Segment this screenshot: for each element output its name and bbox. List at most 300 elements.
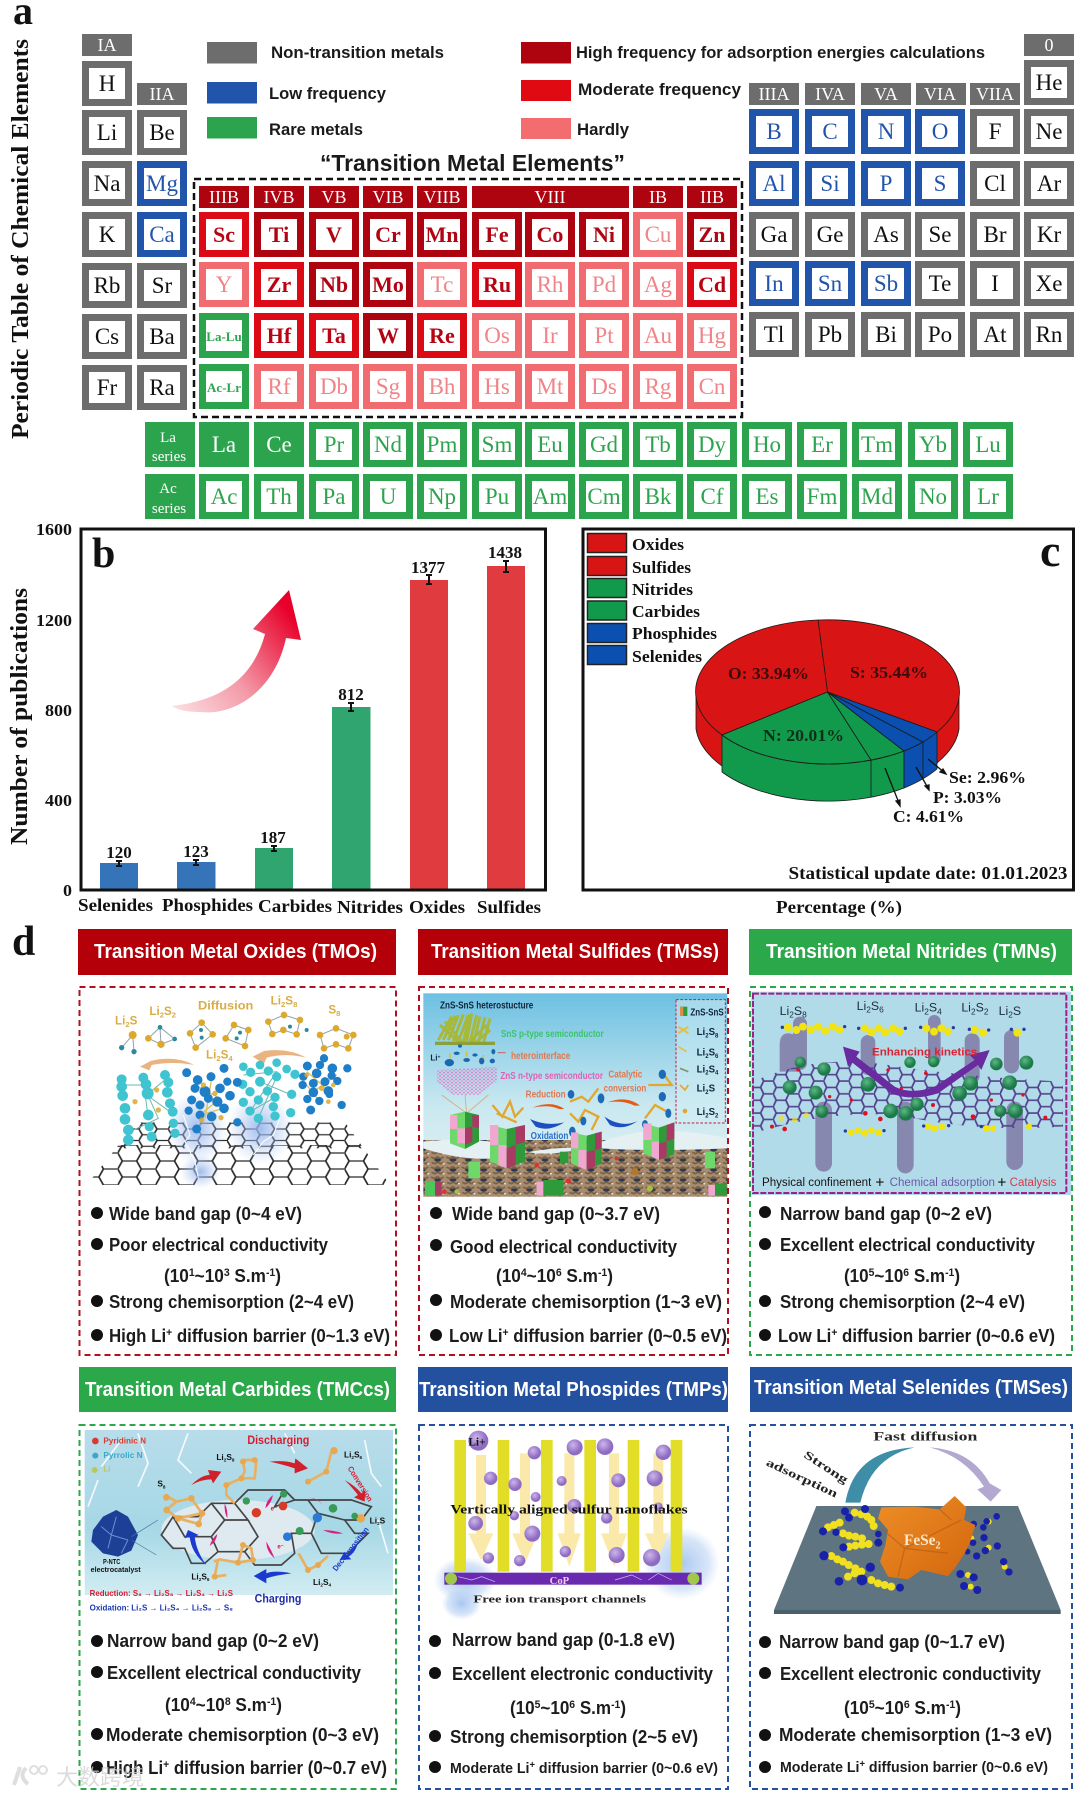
property list: TMSs: ~10 (527, 1266, 556, 1286)
y axis tick labels: 0 (63, 881, 72, 900)
transition-metal element cells: Tc (431, 272, 453, 297)
transition-metal element cells: Rg (645, 374, 672, 399)
y axis tick labels: 400 (45, 791, 72, 810)
chart frame (583, 529, 1074, 890)
watermark logo and text: 大数跨境 (56, 1765, 144, 1790)
transition-metal element cells: Rf (268, 374, 291, 399)
property list: TMNs: diffusion barrier (0~0.6 eV) (837, 1326, 1055, 1346)
illustration: charge and discharge cycle: P-NTC (103, 1557, 121, 1566)
transition-metal element cells: Ac-Lr (207, 380, 241, 395)
lanthanide series row: Eu (537, 432, 563, 457)
property list: TMOs: 1 (189, 1267, 195, 1279)
illustration: ZnS-SnS heterostructure: heterointerface (511, 1051, 571, 1062)
left main-group elements (86, 64, 184, 406)
transition-metal group labels: IB (649, 187, 667, 207)
illustration: charge and discharge cycle: S (323, 1577, 329, 1587)
transition-metal element cells: Ni (593, 222, 615, 247)
pie legend: Nitrides (632, 580, 693, 599)
property list: TMPs: Narrow band gap (0-1.8 eV) (452, 1630, 675, 1650)
legend box: ZnS-SnS species: Li (697, 1048, 705, 1059)
illustration: charge and discharge cycle: 2 (224, 1458, 227, 1463)
property list: TMOs: ~10 (195, 1266, 224, 1286)
illustration: lithium polysulfide diffusion on graphene: 4 (228, 1054, 233, 1063)
bar value labels: 187 (260, 828, 286, 847)
transition-metal element cells: Pd (592, 272, 617, 297)
bar value labels (106, 543, 522, 862)
right main-group elements: I (991, 271, 999, 296)
main-group group labels: 0 (1044, 35, 1054, 55)
legend box: ZnS-SnS species: 2 (705, 1033, 709, 1039)
illustration: confinement, adsorption and catalysis: Enhancing kinetics (872, 1047, 977, 1059)
left main-group elements: K (99, 222, 116, 247)
illustration: charge and discharge cycle: S (354, 1449, 360, 1459)
illustration: charge and discharge cycle: electrocatalyst (91, 1565, 141, 1574)
transition-metal element cells: Sg (376, 374, 401, 399)
illustration: confinement, adsorption and catalysis: Chemical adsorption (890, 1175, 995, 1189)
illustration: lithium polysulfide diffusion on graphene: Li (206, 1048, 216, 1061)
transition-metal element cells: Re (429, 323, 455, 348)
actinide series row: U (380, 484, 397, 509)
illustration: confinement, adsorption and catalysis: 2 (984, 1006, 989, 1016)
pie labels: S: 35.44% (850, 663, 928, 682)
property list: TMNs: + (831, 1327, 837, 1339)
property list: TMNs: Excellent electrical conductivity (780, 1235, 1035, 1255)
dashed card border (80, 1425, 396, 1789)
right main-group elements: Ne (1036, 119, 1062, 144)
property list: TMPs: (10 (510, 1698, 536, 1718)
category labels: Sulfides (477, 897, 541, 917)
right main-group elements: Ga (761, 222, 787, 247)
y axis tick labels: 1200 (36, 611, 72, 630)
property list: TMPs: Strong chemisorption (2~5 eV) (450, 1727, 698, 1747)
growth arrow (172, 590, 301, 712)
property list: TMSes: 6 (904, 1699, 910, 1711)
illustration: ZnS-SnS heterostructure: + (437, 1054, 440, 1060)
illustration: lithium polysulfide diffusion on graphene: S (328, 1003, 336, 1016)
illustration: confinement, adsorption and catalysis: 6 (879, 1005, 884, 1015)
property list: TMSs: Low Li (449, 1326, 506, 1346)
property list: TMSes: (10 (844, 1698, 870, 1718)
illustration: ZnS-SnS heterostructure: Li (430, 1053, 437, 1062)
pie labels: C: 4.61% (893, 807, 964, 826)
property list: TMOs: diffusion barrier (0~1.3 eV) (172, 1326, 390, 1346)
property list: TMOs: + (166, 1327, 172, 1339)
property list: TMSes: + (859, 1759, 865, 1770)
illustration: lithium polysulfide diffusion on graphene: Li (149, 1005, 160, 1018)
legend box: ZnS-SnS species: S (709, 1048, 716, 1059)
legend box: ZnS-SnS species: Li (697, 1107, 705, 1118)
illustration: vertically aligned sulfur nanoflakes: Li+ (468, 1436, 486, 1448)
illustration: charge and discharge cycle: S (201, 1571, 207, 1581)
transition-metal group labels: IVB (264, 187, 294, 207)
actinide series row: Np (428, 484, 456, 509)
pie leader arrows (885, 759, 946, 806)
property list: TMSs: S.m (562, 1266, 598, 1286)
illustration: charge and discharge cycle: Charging (255, 1592, 301, 1606)
actinide series row: Md (861, 484, 893, 509)
illustration: ZnS-SnS heterostructure: SnS p-type semiconductor (501, 1029, 604, 1040)
chart frame (81, 529, 546, 890)
illustration: lithium polysulfide diffusion on graphene: S (221, 1048, 229, 1061)
property list: TMSes: S.m (910, 1698, 946, 1718)
property list: TMSs: 6 (556, 1267, 562, 1279)
main-group group labels: IIA (150, 84, 174, 104)
property list: TMOs: Wide band gap (0~4 eV) (109, 1204, 302, 1224)
legend box: ZnS-SnS species: 2 (715, 1113, 719, 1119)
property list: TMNs: Strong chemisorption (2~4 eV) (780, 1292, 1025, 1312)
lanthanide series row: La (160, 430, 176, 446)
transition-metal element cells: Rh (537, 272, 564, 297)
transition-metal element cells: Nb (320, 272, 348, 297)
illustration: charge and discharge cycle: Li (191, 1571, 199, 1581)
bar value labels: 120 (106, 843, 132, 862)
left main-group elements: Sr (152, 273, 173, 298)
pie legend: Sulfides (632, 558, 691, 577)
right main-group elements: Ge (817, 222, 843, 247)
left main-group elements: Ba (149, 324, 175, 349)
transition-metal group labels: VIB (372, 187, 404, 207)
lanthanide series row: Ce (266, 432, 292, 457)
category labels: Nitrides (337, 897, 403, 917)
legend box: ZnS-SnS species: Li (697, 1027, 705, 1038)
left main-group elements: Fr (97, 375, 118, 400)
illustration: vertically aligned sulfur nanoflakes: Vertically aligned sulfur nanoflakes (450, 1502, 688, 1516)
y axis tick labels: 1600 (36, 520, 72, 539)
illustration: lithium polysulfide diffusion on graphene: S (130, 1014, 138, 1027)
property list: TMCcs: (10 (165, 1695, 191, 1715)
right main-group elements: At (984, 322, 1007, 347)
right main-group elements: Xe (1036, 271, 1062, 296)
pie labels (728, 663, 1026, 826)
transition-metal element cells: Ta (322, 323, 346, 348)
actinide series row: Fm (807, 484, 837, 509)
illustration: FeSe2 adsorption and diffusion: Fast diffusion (873, 1430, 977, 1444)
illustration: lithium polysulfide diffusion on graphene: Diffusion (198, 1000, 253, 1013)
illustration: ZnS-SnS heterostructure: ZnS-SnS heterostucture (440, 1000, 534, 1011)
illustration: charge and discharge cycle: Li (103, 1465, 110, 1474)
right main-group elements: S (934, 171, 946, 196)
actinide series row: Ac (159, 481, 177, 497)
property list: TMSs: diffusion barrier (0~0.5 eV) (509, 1326, 727, 1346)
property list: TMPs: + (529, 1760, 535, 1771)
property list: TMCcs: Narrow band gap (0~2 eV) (107, 1631, 319, 1651)
3D pie (696, 620, 959, 801)
property list: TMNs: (10 (844, 1266, 870, 1286)
panel c: pie chart of percentages (583, 525, 1074, 918)
property list: TMPs: diffusion barrier (0~0.6 eV) (535, 1760, 718, 1777)
illustration: confinement, adsorption and catalysis: 2 (971, 1006, 976, 1016)
illustration: charge and discharge cycle: Pyridinic N (103, 1436, 146, 1445)
dashed card border (750, 1425, 1072, 1789)
illustration: charge and discharge cycle: Li (344, 1449, 351, 1459)
bar value labels: 123 (183, 842, 209, 861)
illustration: charge and discharge cycle: Reduction: S₈ → Li₂S₈ → Li₂S₄ → Li₂S (90, 1588, 233, 1598)
legend box: ZnS-SnS species: S (709, 1027, 716, 1038)
property list: TMPs: ~10 (540, 1698, 569, 1718)
transition-metal element cells: Hg (698, 323, 727, 348)
property list: TMSes: Excellent electronic conductivity (780, 1664, 1041, 1684)
illustration: confinement, adsorption and catalysis: Li (999, 1004, 1008, 1018)
legend: Rare metals (269, 120, 363, 139)
illustration: ZnS-SnS heterostructure: Oxidation (531, 1131, 568, 1142)
property list: TMOs: -1 (266, 1267, 275, 1279)
panel: Transition Metal Phosphides (418, 1367, 728, 1789)
actinide series row: Bk (645, 484, 672, 509)
main-group group labels: IIIA (759, 84, 789, 104)
property list: TMSes: diffusion barrier (0~0.6 eV) (865, 1759, 1048, 1776)
heading: TMSes: Transition Metal Selenides (TMSes) (754, 1377, 1068, 1399)
lanthanide series row: Pr (324, 432, 345, 457)
illustration: charge and discharge cycle: 2 (199, 1577, 202, 1582)
illustration: charge and discharge cycle: 4 (329, 1583, 332, 1588)
illustration: charge and discharge cycle: Li (313, 1577, 320, 1587)
legend: Moderate frequency (578, 80, 742, 99)
legend: Hardly (577, 120, 630, 139)
main-group group labels: VIA (924, 84, 956, 104)
illustration: confinement, adsorption and catalysis: Li (915, 1001, 924, 1015)
legend box: ZnS-SnS species: 2 (705, 1071, 709, 1077)
transition-metal element cells: Db (320, 374, 348, 399)
pie labels: N: 20.01% (763, 726, 844, 745)
property list: TMSes: ~10 (875, 1698, 904, 1718)
illustration: ZnS-SnS heterostructure: Reduction (526, 1090, 566, 1101)
left main-group elements: Li (97, 120, 117, 145)
heading: TMNs: Transition Metal Nitrides (TMNs) (766, 941, 1057, 963)
main-group group labels: VIIA (976, 84, 1014, 104)
lanthanide series row: series (152, 449, 186, 465)
legend box: ZnS-SnS species: ZnS-SnS (690, 1008, 724, 1019)
transition-metal element cells: Cn (699, 374, 726, 399)
actinide series row: series (152, 501, 186, 517)
property list: TMSs: Wide band gap (0~3.7 eV) (452, 1204, 660, 1224)
panel: Transition Metal Oxides (78, 929, 400, 1355)
left main-group elements: Ra (149, 375, 175, 400)
illustration: charge and discharge cycle: Pyrrolic N (103, 1451, 143, 1460)
illustration: charge and discharge cycle: Decomposition (331, 1525, 371, 1573)
illustration: charge and discharge cycle: Conversion (346, 1465, 375, 1503)
transition-metal element cells: Bh (429, 374, 456, 399)
property list: TMPs: Excellent electronic conductivity (452, 1664, 713, 1684)
heading: TMOs: Transition Metal Oxides (TMOs) (94, 941, 377, 963)
actinide series row: Cm (587, 484, 621, 509)
illustration: confinement, adsorption and catalysis: Li (961, 1001, 971, 1015)
legend: Non-transition metals (271, 43, 444, 62)
property list: TMCcs: 8 (225, 1696, 231, 1708)
property list: TMOs: Poor electrical conductivity (109, 1235, 328, 1255)
illustration: confinement, adsorption and catalysis: 4 (937, 1006, 942, 1016)
transition-metal element cells: Au (644, 323, 673, 348)
illustration: charge and discharge cycle: Li (370, 1515, 377, 1525)
illustration: charge and discharge cycle: e⁻ (271, 1507, 277, 1513)
lanthanide series row: Tm (861, 432, 893, 457)
transition-metal element cells: Mo (372, 272, 404, 297)
dashed card border (750, 987, 1072, 1355)
property list: TMCcs: 4 (190, 1696, 197, 1708)
pie legend: Selenides (632, 647, 702, 666)
illustration: confinement, adsorption and catalysis: 2 (1008, 1010, 1013, 1020)
pie legend (588, 534, 717, 666)
lanthanide series row: Tb (645, 432, 671, 457)
illustration: ZnS-SnS heterostructure: Catalytic (608, 1070, 643, 1081)
property list: TMNs: -1 (945, 1267, 954, 1279)
illustration: confinement, adsorption and catalysis: S (794, 1004, 802, 1018)
property list: TMCcs: High Li (106, 1758, 167, 1778)
illustration: confinement, adsorption and catalysis: S (1013, 1004, 1021, 1018)
property list: TMOs: Strong chemisorption (2~4 eV) (109, 1292, 354, 1312)
illustration: lithium polysulfide diffusion on graphene: 2 (172, 1011, 176, 1020)
right main-group elements: C (822, 119, 838, 144)
left main-group elements: Cs (95, 324, 119, 349)
dashed card border (80, 987, 396, 1355)
transition-metal element cells: Cr (375, 222, 401, 247)
transition-metal group labels (199, 186, 737, 208)
illustration: lithium polysulfide diffusion on graphene: 8 (336, 1009, 341, 1018)
illustration: vertically aligned sulfur nanoflakes: Free ion transport channels (473, 1595, 646, 1606)
illustration: charge and discharge cycle: 6 (360, 1455, 363, 1460)
illustration: lithium polysulfide diffusion on graphene: 2 (160, 1011, 164, 1020)
bar value labels: 812 (338, 685, 364, 704)
transition-metal element cells: Os (484, 323, 510, 348)
transition-metal element cells: Y (216, 272, 233, 297)
illustration: confinement, adsorption and catalysis: Li (780, 1004, 789, 1018)
right main-group elements: Sn (818, 271, 843, 296)
watermark logo and text (14, 1765, 144, 1790)
illustration: ZnS-SnS heterostructure (423, 993, 727, 1197)
legend (207, 42, 985, 139)
property list: TMCcs: -1 (267, 1696, 276, 1708)
right main-group elements: F (989, 119, 1001, 144)
illustration: FeSe2 adsorption and diffusion: FeSe (904, 1532, 935, 1549)
property list: TMCcs: diffusion barrier (0~0.7 eV) (169, 1758, 387, 1778)
dashed box: transition metal elements block (194, 179, 742, 417)
right main-group elements (752, 64, 1070, 354)
illustration: charge and discharge cycle: S (380, 1515, 386, 1525)
property list: TMNs: Low Li (778, 1326, 835, 1346)
transition-metal group labels: VIIB (424, 187, 460, 207)
bar value labels: 1377 (411, 558, 446, 577)
dashed card border (419, 1425, 728, 1789)
property list: TMSes: -1 (946, 1699, 955, 1711)
illustration: confinement, adsorption and catalysis (748, 992, 1071, 1195)
lanthanide series row: Sm (482, 432, 512, 457)
legend box: ZnS-SnS species: S (709, 1084, 716, 1095)
property list: TMNs: ) (954, 1266, 960, 1286)
panel: Transition Metal Sulfides (418, 929, 728, 1355)
heading: TMCcs: Transition Metal Carbides (TMCcs) (85, 1379, 390, 1401)
transition-metal element cells: Zr (267, 272, 291, 297)
property list: TMSs: + (503, 1327, 509, 1339)
actinide series row: Ac (211, 484, 237, 509)
legend box: ZnS-SnS species: 2 (705, 1113, 709, 1119)
property list: TMSes: 5 (869, 1699, 875, 1711)
illustration: charge and discharge cycle: 2 (320, 1583, 323, 1588)
left main-group elements: Be (149, 120, 175, 145)
y axis tick labels (36, 520, 72, 900)
property list: TMSs: -1 (598, 1267, 607, 1279)
pie labels: Se: 2.96% (949, 768, 1026, 787)
transition-metal element cells: Ds (591, 374, 617, 399)
property list: TMPs: 6 (569, 1699, 575, 1711)
transition-metal element cells: Ti (269, 222, 289, 247)
panel: Transition Metal Nitrides (748, 929, 1072, 1355)
heading: TMOs (78, 929, 396, 975)
right main-group elements: Pb (818, 322, 842, 347)
actinide series row: No (919, 484, 947, 509)
illustration: confinement, adsorption and catalysis: S (871, 999, 879, 1013)
bar value labels: 1438 (488, 543, 522, 562)
transition-metal element cells: Sc (213, 222, 235, 247)
transition-metal group labels: VIII (535, 187, 565, 207)
property list: TMNs: 6 (903, 1267, 909, 1279)
property list: TMPs: -1 (611, 1699, 620, 1711)
right main-group elements: In (764, 271, 784, 296)
lanthanide series row: Gd (590, 432, 619, 457)
heading: TMSs: Transition Metal Sulfides (TMSs) (431, 941, 719, 963)
main-group group labels (82, 34, 1074, 105)
illustration: charge and discharge cycle: 8 (163, 1484, 166, 1489)
illustration: confinement, adsorption and catalysis: 2 (924, 1006, 929, 1016)
transition-metal element cells: V (326, 222, 342, 247)
heading: TMPs: Transition Metal Phospides (TMPs) (419, 1379, 728, 1401)
panel label b: b (92, 531, 115, 577)
property list: TMSes: Moderate chemisorption (1~3 eV) (779, 1725, 1052, 1745)
illustration: lithium polysulfide diffusion on graphene: 2 (125, 1020, 130, 1029)
property list: TMNs (759, 1204, 1055, 1346)
transition-metal group labels: IIIB (209, 187, 239, 207)
property list: TMSs (430, 1204, 727, 1346)
illustration: FeSe2 adsorption and diffusion: 2 (935, 1540, 940, 1551)
legend box: ZnS-SnS species: 2 (705, 1090, 709, 1096)
pie legend: Carbides (632, 602, 700, 621)
right main-group elements: Kr (1037, 222, 1061, 247)
heading: TMNs (749, 929, 1072, 975)
lanthanide series row: Ho (753, 432, 781, 457)
property list: TMSs: ) (607, 1266, 613, 1286)
illustration: ZnS-SnS heterostructure: conversion (604, 1084, 646, 1095)
right main-group elements: O (932, 119, 948, 144)
illustration: confinement, adsorption and catalysis: Catalysis (1010, 1175, 1056, 1189)
lanthanide series row: Yb (919, 432, 947, 457)
property list: TMPs: Moderate Li (450, 1760, 534, 1777)
illustration: confinement, adsorption and catalysis: Li (857, 999, 866, 1013)
category labels (78, 895, 541, 917)
property list: TMPs: 5 (535, 1699, 540, 1711)
illustration: charge and discharge cycle: 2 (377, 1521, 380, 1526)
illustration: charge and discharge cycle: S (157, 1479, 163, 1489)
actinide series row: Th (266, 484, 292, 509)
right main-group elements: Cl (984, 171, 1006, 196)
actinide series row (145, 474, 1010, 519)
legend box: ZnS-SnS species: 2 (705, 1054, 709, 1060)
property list: TMSs: Good electrical conductivity (450, 1237, 677, 1257)
illustration: vertically aligned sulfur nanoflakes: CoP (550, 1576, 570, 1587)
transition-metal element cells (202, 216, 734, 406)
transition-metal element cells: La-Lu (206, 329, 242, 344)
property list: TMNs: 5 (869, 1267, 874, 1279)
illustration: charge and discharge cycle: S (226, 1452, 232, 1462)
right main-group elements: Tl (764, 322, 784, 347)
y axis tick labels: 800 (45, 701, 72, 720)
illustration: FeSe2 adsorption and diffusion: adsorption (764, 1456, 840, 1501)
property list: TMCcs: S.m (231, 1695, 267, 1715)
right main-group elements: Si (820, 171, 840, 196)
illustration: lithium polysulfide diffusion on graphene: 2 (216, 1054, 221, 1063)
illustration: charge and discharge cycle: 8 (232, 1458, 235, 1463)
property list: TMSes (759, 1632, 1052, 1776)
actinide series row: Am (533, 484, 567, 509)
illustration: lithium polysulfide diffusion on graphene: 2 (281, 1000, 285, 1009)
right main-group elements: Bi (875, 322, 897, 347)
